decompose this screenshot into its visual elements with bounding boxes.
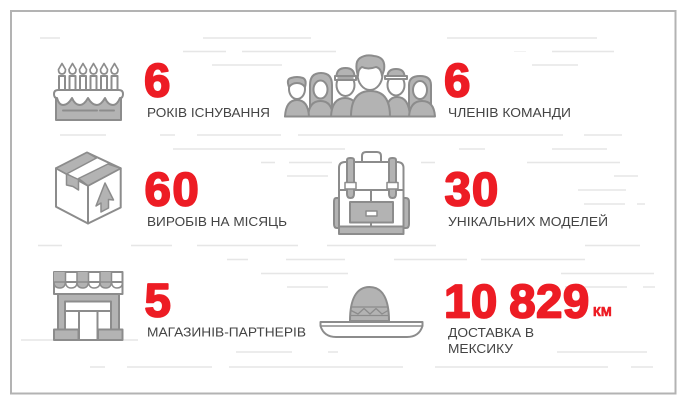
label: team members: ЧЛЕНІВ КОМАНДИ xyxy=(448,105,571,120)
icon: storefront xyxy=(54,272,122,340)
number: 6 years: 6 xyxy=(144,54,170,108)
number: 10 829 km: КМ xyxy=(593,304,612,319)
icon: cardboard box xyxy=(56,152,121,224)
person 4 xyxy=(351,55,390,116)
label: years: РОКІВ ІСНУВАННЯ xyxy=(147,105,270,120)
icon: sombrero xyxy=(320,287,422,337)
label: delivery to Mexico: ДОСТАВКА В xyxy=(448,325,534,340)
person 1 xyxy=(285,77,309,116)
icon: backpack xyxy=(334,152,409,234)
icon: birthday cake xyxy=(54,64,123,120)
person 3 xyxy=(331,68,359,116)
person 2 xyxy=(308,73,333,116)
label: partner stores: МАГАЗИНІВ-ПАРТНЕРІВ xyxy=(147,324,306,340)
panel: partner stores xyxy=(54,272,306,340)
label: products per month: ВИРОБІВ НА МІСЯЦЬ xyxy=(147,214,287,229)
number: 60: 60 xyxy=(144,164,200,216)
panel: unique models xyxy=(334,152,608,234)
panel: years xyxy=(54,54,270,120)
number: 6 team members: 6 xyxy=(444,54,470,108)
panel: products per month xyxy=(56,152,287,229)
panel: delivery to Mexico xyxy=(320,276,612,356)
number: 5: 5 xyxy=(144,274,171,328)
number: 10 829 km: 10 829 xyxy=(444,276,590,328)
label: delivery to Mexico, line 2: МЕКСИКУ xyxy=(448,341,514,356)
person 5 xyxy=(385,69,410,116)
number: 30: 30 xyxy=(444,164,499,216)
icon: team people xyxy=(285,55,435,116)
panel: team xyxy=(285,54,571,120)
label: unique models: УНІКАЛЬНИХ МОДЕЛЕЙ xyxy=(448,214,608,229)
person 6 xyxy=(409,76,435,116)
